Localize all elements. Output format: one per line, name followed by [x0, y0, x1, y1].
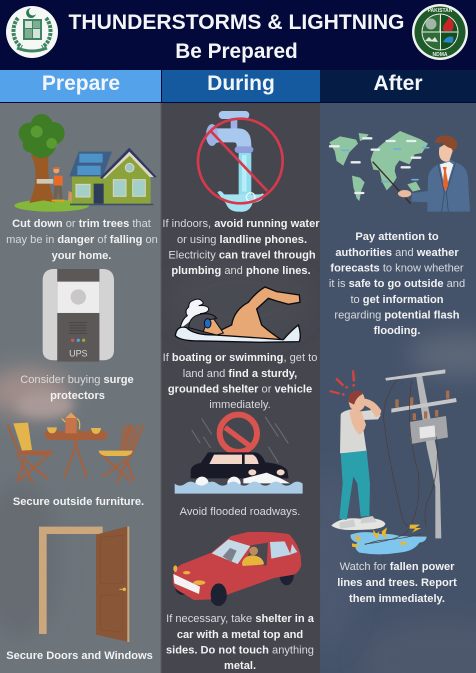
- text: fallen power lines: fallen power: [390, 561, 455, 573]
- header band: [0, 0, 476, 70]
- panel: After: [320, 103, 476, 673]
- tab: After: [320, 70, 476, 102]
- text: secure doors: Secure Doors and Windows: [6, 650, 153, 662]
- icon: presenter with weather map: [329, 131, 470, 212]
- panel: During: land and: [183, 368, 228, 380]
- text: surge protectors: Consider buying: [20, 374, 104, 386]
- text: cut down trees: or trim trees that: [66, 218, 151, 230]
- panel: After: to: [350, 294, 363, 306]
- panel: During: plumbing: [171, 265, 221, 277]
- icon: man with phone and fallen power lines: [329, 369, 457, 554]
- panel: During: or vehicle: [262, 384, 312, 396]
- tab: Prepare: Prepare: [42, 72, 120, 95]
- panel: During: grounded shelter: [168, 384, 259, 396]
- panel: After: them immediately.: [349, 593, 445, 605]
- icon: person in red car: [173, 532, 301, 606]
- panel: After: it is: [329, 278, 349, 290]
- panel: Prepare: may be in: [6, 234, 57, 246]
- icon: NDMA logo: NDMA: [432, 52, 448, 58]
- panel: During: [161, 103, 320, 673]
- panel: After: to know whether: [380, 262, 464, 274]
- panel: After: flooding.: [374, 325, 420, 337]
- panel: During: anything: [269, 644, 314, 656]
- icon: no running water: [198, 111, 283, 212]
- text: surge protectors: surge: [104, 374, 134, 386]
- icon: NDMA logo: [412, 4, 468, 60]
- subtitle: Be Prepared: [175, 40, 298, 63]
- text: boating or swimming: boating or swimming, get to: [172, 352, 317, 364]
- text: avoid running water: avoid running water: [214, 218, 320, 230]
- panel: After: get information: [363, 294, 444, 306]
- title: THUNDERSTORMS & LIGHTNING: [69, 11, 404, 34]
- text: shelter in a car: If necessary, take: [166, 613, 255, 625]
- icon: UPS surge protector: [43, 269, 114, 362]
- panel: During: or using: [177, 234, 220, 246]
- panel: After: and weather: [395, 247, 459, 259]
- icon: NDMA logo: PAKISTAN: [428, 8, 453, 14]
- tab: During: During: [207, 72, 275, 95]
- icon: UPS surge protector: UPS: [69, 348, 88, 358]
- panel: After: lines and trees. Report: [337, 577, 457, 589]
- text: pay attention: Pay attention to: [355, 231, 439, 243]
- text: avoid running water: If indoors,: [162, 218, 214, 230]
- panel: Prepare: danger of falling on: [57, 234, 158, 246]
- panel: During: metal.: [224, 660, 256, 672]
- panel: After: safe to go outside and: [349, 278, 465, 290]
- panel: After: authorities: [335, 247, 392, 259]
- text: fallen power lines: Watch for: [340, 561, 390, 573]
- text: flooded roadways: Avoid flooded roadways.: [180, 506, 300, 518]
- panel: During: Electricity: [168, 250, 219, 262]
- panel: Prepare: protectors: [50, 390, 105, 402]
- tab: Prepare: [0, 70, 161, 102]
- tab: During: [162, 70, 320, 102]
- panel: During: car with a metal top and: [177, 629, 303, 641]
- panel: During: can travel through: [219, 250, 316, 262]
- panel: Prepare: [0, 103, 161, 673]
- tab: After: After: [373, 72, 423, 95]
- icon: open door: [39, 526, 129, 642]
- icon: man cutting tree and house: [14, 114, 157, 212]
- panel: During: find a sturdy,: [228, 368, 297, 380]
- text: secure furniture: Secure outside furniture.: [13, 496, 144, 508]
- panel: During: immediately.: [209, 399, 271, 411]
- icon: Pakistan state emblem: [6, 6, 58, 58]
- text: boating or swimming: If: [163, 352, 172, 364]
- panel: Prepare: your home.: [52, 250, 111, 262]
- panel: After: potential flash: [384, 310, 460, 322]
- text: shelter in a car: shelter in a: [255, 613, 315, 625]
- icon: swimmer: [175, 287, 300, 342]
- panel: During: landline phones.: [220, 234, 307, 246]
- text: cut down trees: Cut down: [12, 218, 63, 230]
- panel: During: sides. Do not touch: [166, 644, 269, 656]
- panel: During: and phone lines.: [224, 265, 311, 277]
- icon: flooded road: [175, 415, 303, 494]
- icon: outdoor furniture: [7, 413, 144, 483]
- panel: After: regarding: [334, 310, 384, 322]
- panel: After: forecasts: [330, 262, 380, 274]
